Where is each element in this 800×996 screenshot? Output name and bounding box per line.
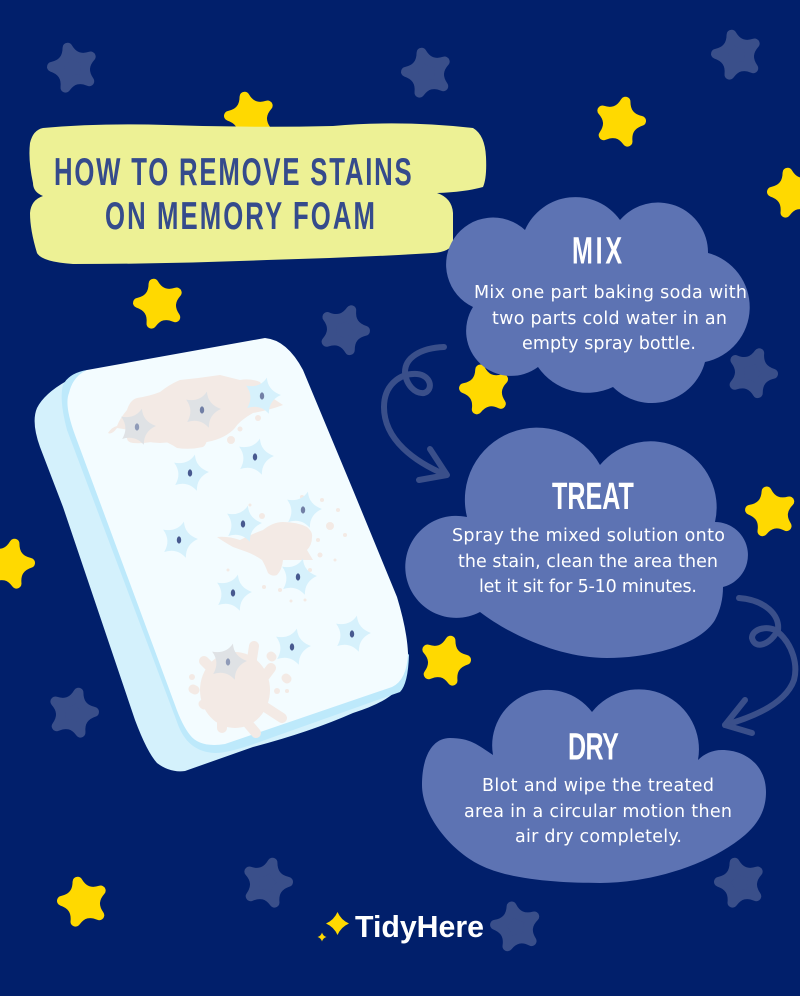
dry heading: DRY bbox=[568, 725, 619, 768]
arrow: treat to dry bbox=[725, 598, 795, 733]
dry description: air dry completely. bbox=[515, 827, 682, 847]
stain: middle bbox=[217, 522, 313, 576]
treat description: the stain, clean the area then bbox=[458, 552, 718, 572]
logo: TidyHere: TidyHere bbox=[355, 909, 484, 944]
stain: top bbox=[108, 375, 283, 449]
arrow: mix to treat bbox=[384, 347, 447, 480]
treat description: Spray the mixed solution onto bbox=[452, 526, 725, 546]
title text bbox=[54, 151, 412, 238]
star eyes bbox=[135, 392, 354, 666]
dry description: Blot and wipe the treated bbox=[482, 776, 714, 796]
panel: dry bbox=[422, 689, 766, 883]
panel: treat bbox=[405, 428, 748, 658]
mix description: two parts cold water in an bbox=[492, 309, 727, 329]
mix heading: MIX bbox=[572, 229, 623, 272]
title text: HOW TO REMOVE STAINS bbox=[54, 151, 412, 194]
stain: bottom bbox=[189, 646, 289, 733]
dry description: area in a circular motion then bbox=[464, 802, 732, 822]
treat description: let it sit for 5-10 minutes. bbox=[479, 577, 697, 597]
mix description: empty spray bottle. bbox=[522, 334, 696, 354]
title banner bbox=[29, 123, 486, 264]
title text: ON MEMORY FOAM bbox=[105, 195, 375, 238]
mattress illustration bbox=[35, 338, 409, 771]
small light stars on mattress bbox=[116, 373, 374, 682]
panel: mix bbox=[446, 197, 750, 403]
mix description: Mix one part baking soda with bbox=[474, 283, 747, 303]
treat heading: TREAT bbox=[552, 475, 634, 517]
